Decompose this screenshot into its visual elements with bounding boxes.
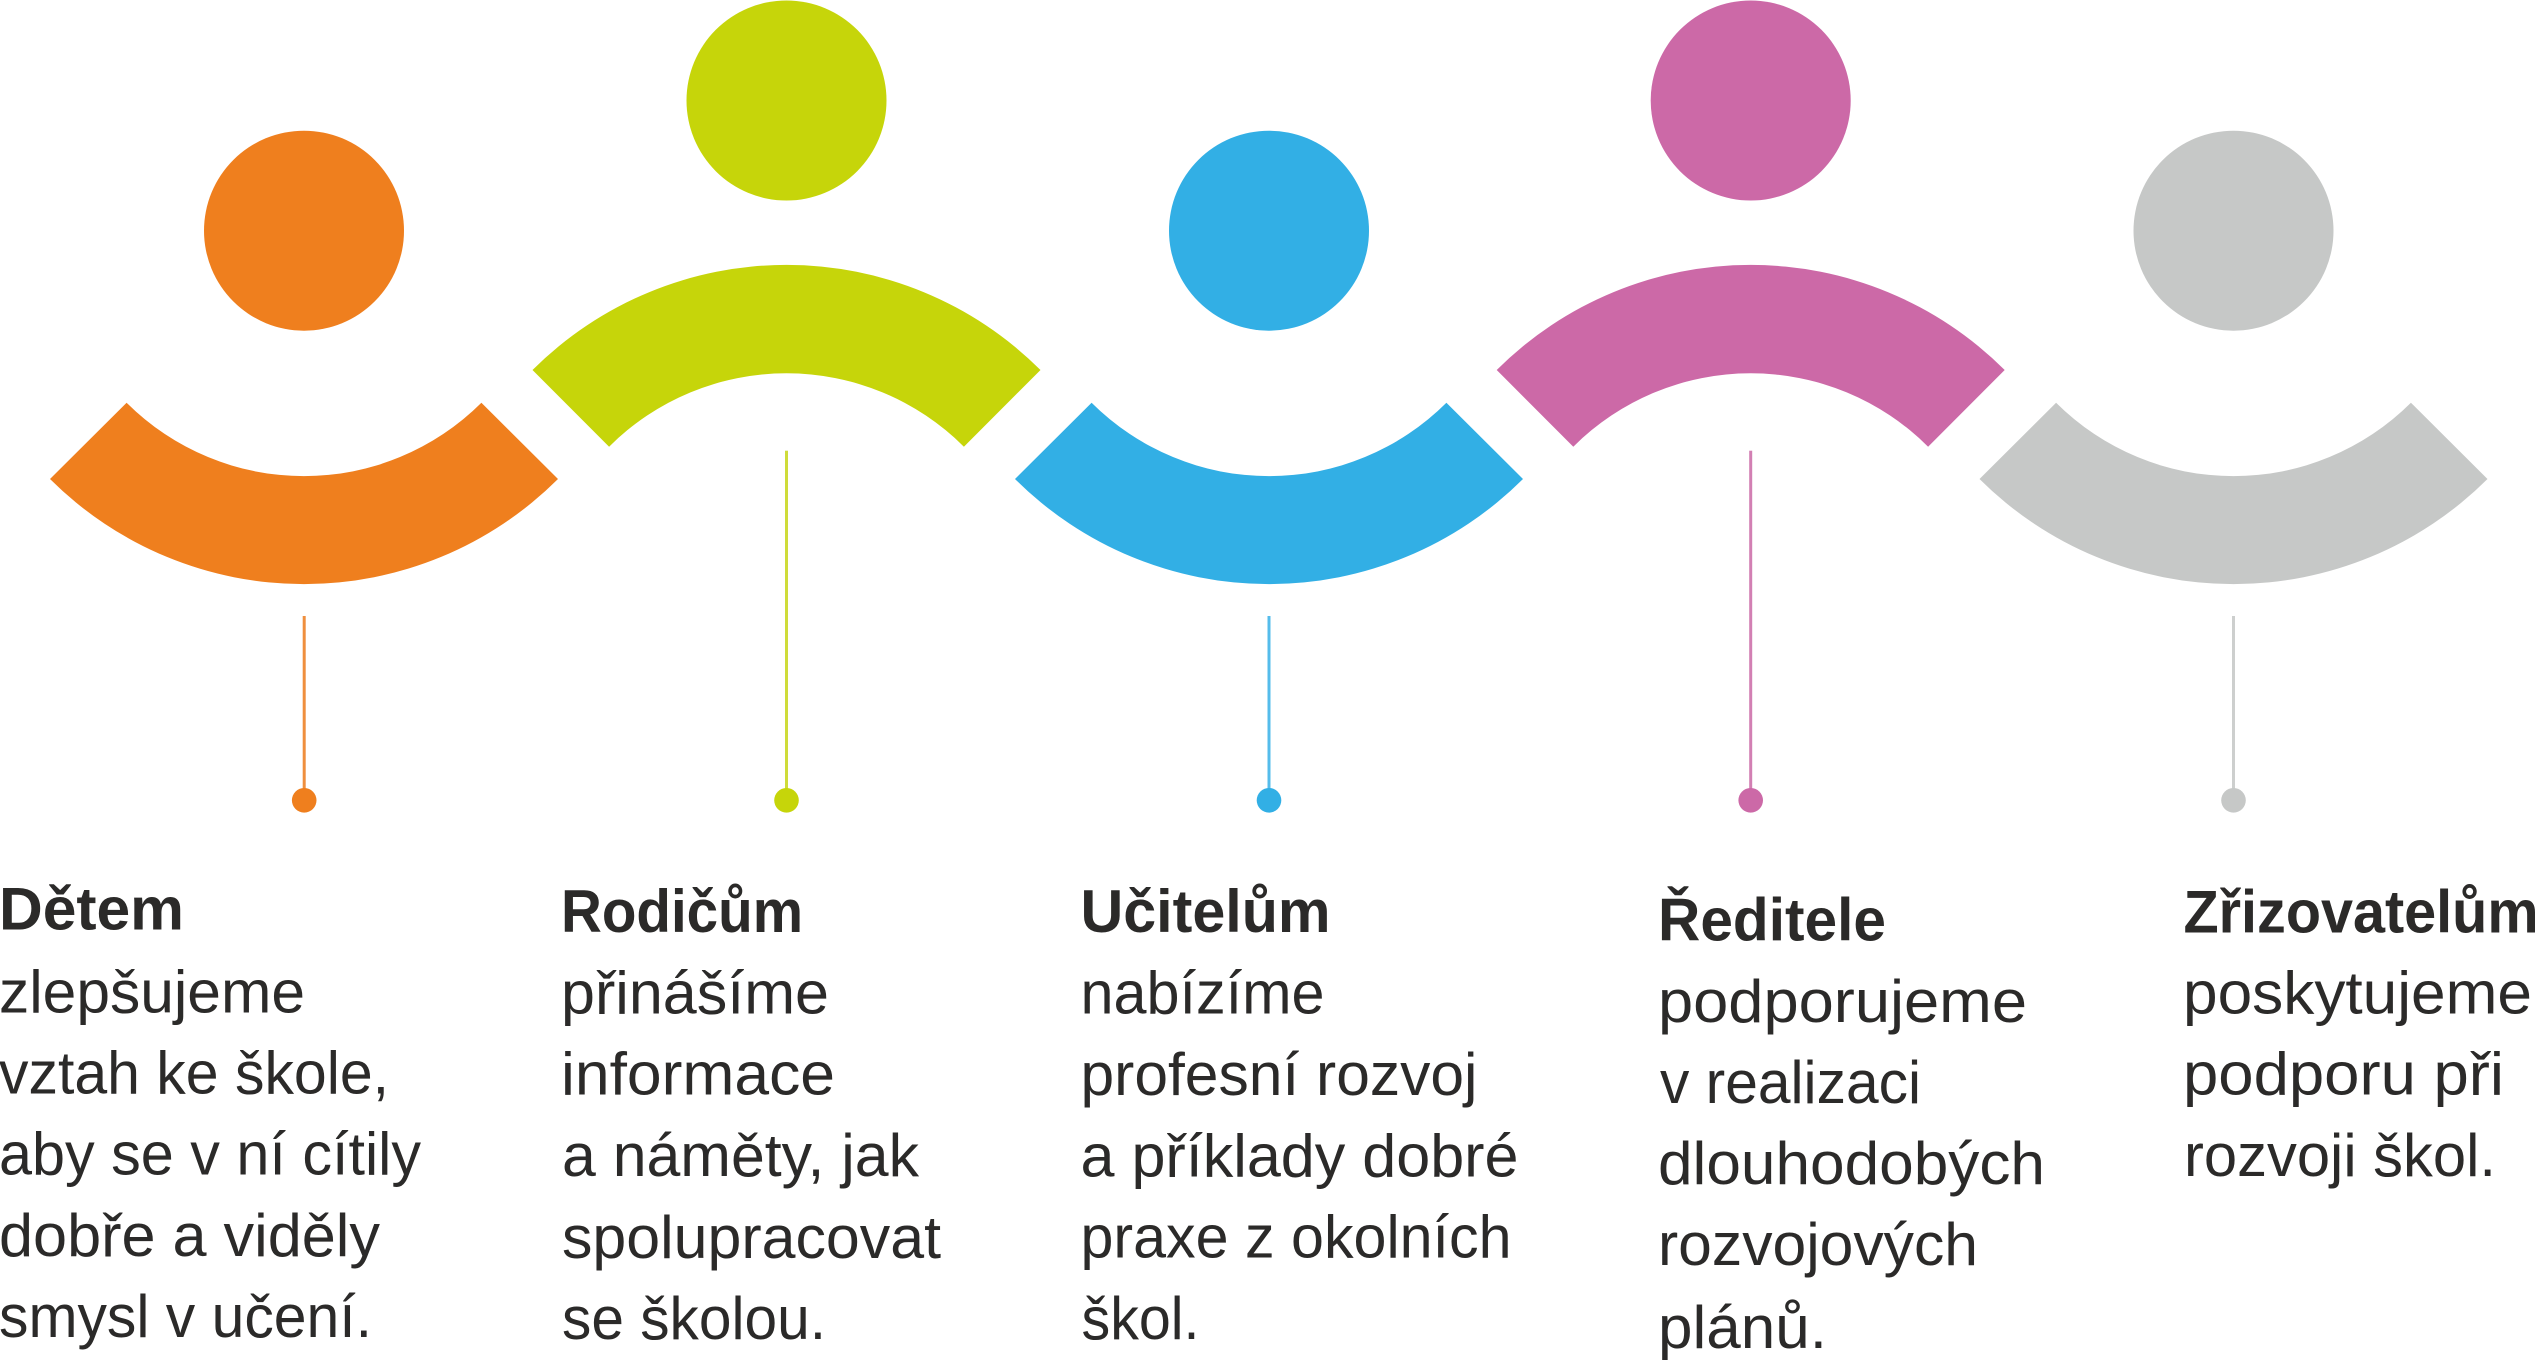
body text: Ředitele: v realizaci	[1660, 1049, 1921, 1116]
icon: green head	[686, 0, 886, 200]
body text: Ředitele: rozvojových	[1658, 1211, 1978, 1278]
icon: green arc	[532, 265, 1040, 447]
orange connector dot	[292, 788, 317, 813]
text block: Učitelům	[1080, 878, 1518, 1352]
body text: Učitelům: praxe z okolních	[1080, 1204, 1512, 1270]
body text: Zřizovatelům: poskytujeme	[2183, 960, 2532, 1026]
body text: Rodičům: přinášíme	[561, 960, 829, 1026]
icon: gray head	[2134, 131, 2334, 331]
body text: Ředitele: plánů.	[1658, 1294, 1827, 1360]
body text: Zřizovatelům	[2183, 960, 2532, 1189]
heading: Dětem: Dětem	[0, 876, 184, 942]
body text: Ředitele: dlouhodobých	[1658, 1130, 2045, 1197]
icon: orange arc	[50, 403, 558, 584]
body text: Dětem: dobře a viděly	[0, 1202, 380, 1269]
body text: Dětem: vztah ke škole,	[0, 1040, 389, 1106]
body text: Učitelům: a příklady dobré	[1080, 1122, 1518, 1190]
icon: magenta head	[1651, 0, 1851, 200]
magenta connector line	[1749, 451, 1752, 800]
body text: Dětem: zlepšujeme	[0, 958, 305, 1026]
blue connector line	[1268, 616, 1270, 800]
gray connector dot	[2221, 788, 2246, 813]
heading: Ředitele: Ředitele	[1658, 886, 1886, 954]
text block: Dětem	[0, 876, 421, 1350]
body text: Učitelům: škol.	[1082, 1285, 1200, 1352]
orange connector line	[303, 616, 306, 800]
body text: Rodičům	[561, 960, 941, 1352]
panel: Dětem	[0, 131, 558, 1350]
body text: Dětem: aby se v ní cítily	[0, 1120, 421, 1188]
panel: Rodičům	[532, 0, 1040, 1352]
heading: Rodičům: Rodičům	[561, 878, 803, 945]
body text: Učitelům	[1080, 960, 1518, 1352]
body text: Zřizovatelům: rozvoji škol.	[2184, 1122, 2496, 1189]
text block: Zřizovatelům	[2183, 878, 2538, 1189]
heading: Učitelům: Učitelům	[1080, 878, 1330, 945]
icon: magenta arc	[1497, 265, 2005, 447]
icon: orange head	[204, 131, 404, 331]
body text: Rodičům: se školou.	[562, 1285, 826, 1352]
body text: Rodičům: a náměty, jak	[562, 1122, 920, 1189]
text block: Rodičům	[561, 878, 941, 1352]
panel: Ředitele	[1497, 0, 2045, 1360]
body text: Učitelům: nabízíme	[1080, 960, 1324, 1026]
body text: Rodičům: informace	[561, 1040, 835, 1108]
body text: Ředitele: podporujeme	[1658, 968, 2027, 1035]
body text: Učitelům: profesní rozvoj	[1080, 1041, 1478, 1108]
gray connector line	[2232, 616, 2235, 800]
icon: gray arc	[1980, 403, 2488, 584]
green connector dot	[774, 788, 799, 813]
blue connector dot	[1257, 788, 1281, 813]
panel: Zřizovatelům	[1980, 131, 2538, 1189]
body text: Zřizovatelům: podporu při	[2183, 1040, 2504, 1108]
text block: Ředitele	[1658, 886, 2045, 1360]
body text: Ředitele	[1658, 968, 2045, 1360]
body text: Dětem: smysl v učení.	[0, 1283, 372, 1350]
body text: Dětem	[0, 958, 421, 1350]
panel: Učitelům	[1015, 131, 1523, 1352]
icon: blue head	[1169, 131, 1369, 331]
icon: blue arc	[1015, 403, 1523, 584]
green connector line	[785, 451, 788, 800]
magenta connector dot	[1738, 788, 1763, 813]
body text: Rodičům: spolupracovat	[562, 1204, 941, 1271]
